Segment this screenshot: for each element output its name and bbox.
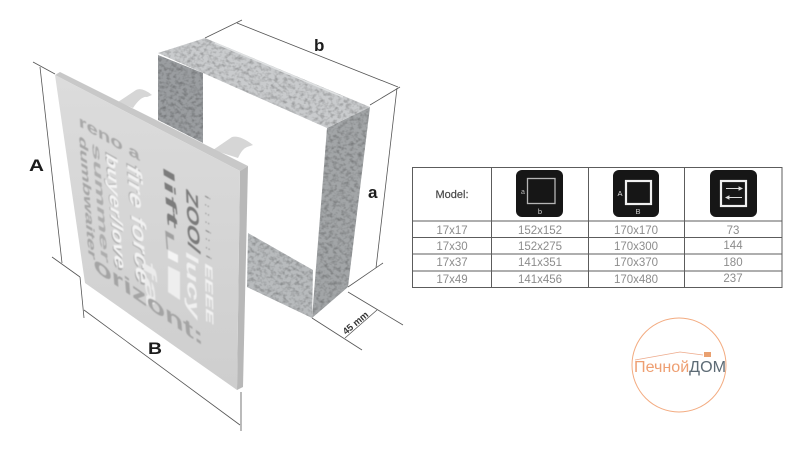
table rows: 180 bbox=[723, 257, 743, 269]
logo roof bbox=[635, 352, 703, 360]
frame bottom panel bbox=[247, 233, 313, 318]
icon: inner size: a bbox=[521, 189, 525, 196]
grille cut-out lettering bbox=[76, 112, 216, 351]
icon: outer size bbox=[613, 170, 659, 217]
table rows: 144 bbox=[723, 240, 743, 252]
table rows: 152x275 bbox=[518, 241, 562, 253]
grille cut-out lettering: dumbwaiter bbox=[76, 134, 99, 263]
table rows: 141x456 bbox=[518, 274, 562, 286]
table rows: 170x300 bbox=[614, 241, 658, 253]
table rows: 170x170 bbox=[614, 225, 658, 237]
logo wordmark: ПечнойДОМ bbox=[634, 359, 726, 376]
label 45 mm: 45 mm bbox=[341, 310, 371, 337]
table rows: 17x17 bbox=[436, 225, 468, 237]
table rows bbox=[436, 225, 743, 286]
grille clip left bbox=[118, 89, 152, 108]
grille top edge bbox=[55, 72, 248, 171]
table rows: 17x30 bbox=[436, 241, 468, 253]
table rows: 170x370 bbox=[614, 257, 658, 269]
grille cut-out lettering: lucy bbox=[182, 248, 203, 324]
dimension b bbox=[205, 20, 400, 105]
dimensions table bbox=[412, 167, 782, 288]
icon: outer size: A bbox=[617, 189, 623, 198]
grille cut-out lettering: EEEE bbox=[202, 261, 216, 327]
grille cut-out lettering: L bbox=[161, 226, 177, 257]
grille cut-out lettering: buyer/love bbox=[101, 148, 129, 276]
frame right panel bbox=[312, 107, 370, 318]
grille cut-out lettering: summer bbox=[88, 140, 112, 267]
frame top panel bbox=[158, 38, 370, 128]
table rows: 152x152 bbox=[518, 225, 562, 237]
logo chimney bbox=[704, 352, 711, 357]
icon: airflow area bbox=[710, 170, 757, 217]
grille cut-out lettering: buyer/love bbox=[102, 150, 129, 274]
grille cut-out lettering: fire force bbox=[122, 158, 154, 292]
logo ring bbox=[632, 318, 726, 412]
decorative grille bbox=[55, 72, 248, 390]
label B: B bbox=[148, 339, 162, 358]
grille cut-out lettering: i:::i::i bbox=[203, 194, 212, 260]
dimension A bbox=[33, 62, 80, 277]
grille face bbox=[55, 75, 240, 390]
table rows: 141x351 bbox=[518, 257, 562, 269]
grille cut-out lettering: reno a bbox=[78, 112, 141, 166]
header: model: Model: bbox=[435, 189, 469, 201]
grille cut-out lettering: fa bbox=[139, 256, 162, 314]
frame top slit bbox=[215, 43, 343, 97]
icon: inner size: b bbox=[538, 207, 542, 216]
icon: outer size: B bbox=[635, 207, 641, 216]
grille cut-out lettering: fire force bbox=[123, 160, 155, 290]
grille cut-out lettering: lift bbox=[159, 163, 182, 234]
grille side edge bbox=[237, 166, 248, 390]
table grid bbox=[412, 167, 782, 288]
grille cut-out lettering: ZOO/ bbox=[182, 186, 203, 257]
table rows: 237 bbox=[723, 273, 743, 285]
mounting frame bbox=[158, 38, 370, 318]
dimension B bbox=[80, 277, 241, 431]
logo bbox=[632, 318, 726, 412]
label a: a bbox=[368, 183, 378, 202]
table rows: 170x480 bbox=[614, 274, 658, 286]
frame left inner panel bbox=[158, 55, 203, 143]
table rows: 73 bbox=[727, 225, 739, 237]
label A: A bbox=[29, 156, 44, 175]
icon: inner size bbox=[516, 170, 563, 217]
table rows: 17x49 bbox=[436, 274, 468, 286]
label b: b bbox=[314, 36, 324, 55]
grille cut-out lettering: orizont: bbox=[92, 249, 204, 351]
dimension a bbox=[348, 88, 397, 287]
dimension 45 mm bbox=[312, 292, 403, 350]
table rows: 17x37 bbox=[436, 257, 468, 269]
grille clip right bbox=[213, 137, 253, 158]
